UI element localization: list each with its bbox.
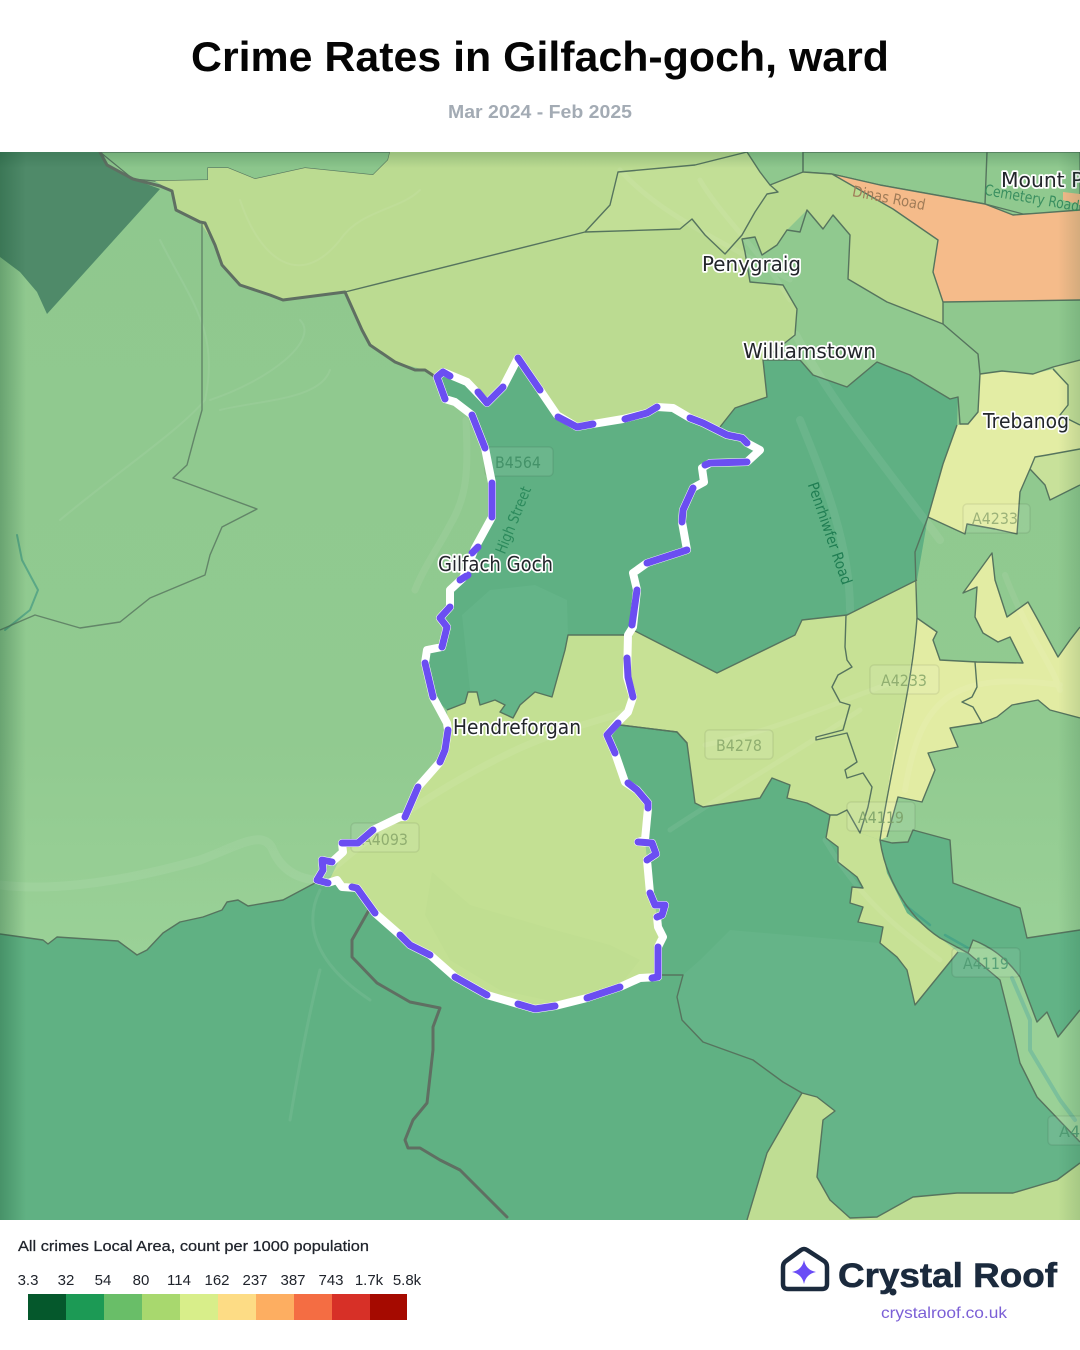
road labels: A4233 — [881, 671, 927, 690]
region: orange high crime — [832, 174, 1080, 302]
region: south-east woodland lighter green — [960, 952, 966, 953]
legend — [18, 1238, 422, 1320]
road labels: A4119 — [963, 954, 1009, 973]
region: south-east yellow-green — [747, 1093, 1080, 1220]
road labels: Dinas Road — [851, 182, 927, 214]
legend scale labels: 114 — [167, 1272, 191, 1289]
river: teal lines — [5, 535, 1075, 1120]
legend scale labels: 80 — [133, 1272, 149, 1289]
legend scale labels: 5.8k — [393, 1272, 422, 1289]
region: pale green south-east of Trebanog — [1030, 449, 1080, 500]
road labels: A4 — [1059, 1122, 1080, 1141]
legend scale labels: 1.7k — [355, 1272, 384, 1289]
logo keyhole detail — [890, 1288, 896, 1296]
road labels — [362, 181, 1080, 1141]
region: east medium green — [943, 300, 1080, 374]
choropleth map — [0, 152, 1080, 1220]
region: northern yellow-green — [155, 152, 942, 427]
region: top band — [100, 152, 390, 181]
region: western base area — [0, 152, 1080, 971]
logo wordmark: Crystal Roof — [838, 1257, 1058, 1295]
place labels: Trebanog — [982, 409, 1069, 433]
region: ward southern darker band — [425, 872, 640, 1003]
legend scale labels: 54 — [95, 1272, 111, 1289]
road labels: High Street — [492, 484, 535, 556]
region: pale green east of Trebanog — [1053, 360, 1080, 425]
legend scale labels: 743 — [318, 1272, 344, 1289]
region: river strip east — [968, 940, 1080, 1142]
region: east valley green — [880, 830, 1080, 1037]
legend scale labels: 32 — [58, 1272, 74, 1289]
ward outline purple dashes — [317, 358, 747, 1009]
logo: Crystal Roof — [783, 1249, 1058, 1322]
title: Crime Rates in Gilfach-goch, ward — [191, 33, 889, 80]
region: ward north dark green — [429, 366, 713, 710]
thick boundary: south — [352, 910, 507, 1217]
ward boundary: Gilfach-goch — [317, 358, 760, 1009]
legend title: All crimes Local Area, count per 1000 population — [18, 1238, 369, 1255]
legend scale labels: 387 — [280, 1272, 306, 1289]
ward outline white — [317, 358, 760, 1009]
icon: house with star — [783, 1249, 827, 1289]
place labels: Williamstown — [743, 339, 876, 363]
region: large southern green — [0, 726, 966, 1220]
legend scale labels: 3.3 — [18, 1272, 38, 1289]
region boundary lines — [0, 152, 1080, 1220]
road labels: B4278 — [716, 736, 762, 755]
road labels: Penrhiwfer Road — [804, 480, 856, 587]
region: dark north-west — [0, 152, 160, 314]
region: pale yellow-green strip — [826, 810, 958, 1005]
place labels: Hendreforgan — [453, 715, 581, 739]
legend scale labels: 237 — [242, 1272, 268, 1289]
road labels: A4093 — [362, 830, 408, 849]
faint roads and built-up texture — [288, 377, 928, 1122]
region: ward north lighter patch — [462, 585, 568, 718]
region: Trebanog pale yellow — [928, 369, 1080, 534]
region: ward southern yellow-green — [328, 620, 663, 1009]
place labels — [438, 168, 1080, 739]
website url: crystalroof.co.uk — [881, 1305, 1008, 1322]
place labels: Penygraig — [702, 252, 801, 276]
map edge vignette — [0, 152, 1080, 1220]
region: top-right green — [803, 152, 1080, 214]
road labels: B4564 — [495, 453, 541, 472]
legend scale labels — [18, 1272, 422, 1289]
road labels: A4119 — [858, 808, 904, 827]
region: Penygraig lighter yellow-green — [585, 152, 778, 254]
legend colour bar — [28, 1294, 407, 1320]
region: A4233 pale yellow — [880, 553, 1080, 840]
legend scale labels: 162 — [204, 1272, 230, 1289]
region: Williamstown medium green — [742, 212, 822, 284]
place labels: Gilfach Goch — [438, 552, 553, 576]
thick boundary: north-west — [100, 152, 437, 378]
region: B4278 yellow-green — [620, 580, 917, 840]
region: central-east dark green — [620, 360, 958, 673]
road labels: A4233 — [972, 509, 1018, 528]
subtitle: date range: Mar 2024 - Feb 2025 — [448, 102, 632, 122]
region: orange fragment — [1063, 192, 1080, 205]
road shields — [351, 447, 1080, 1145]
